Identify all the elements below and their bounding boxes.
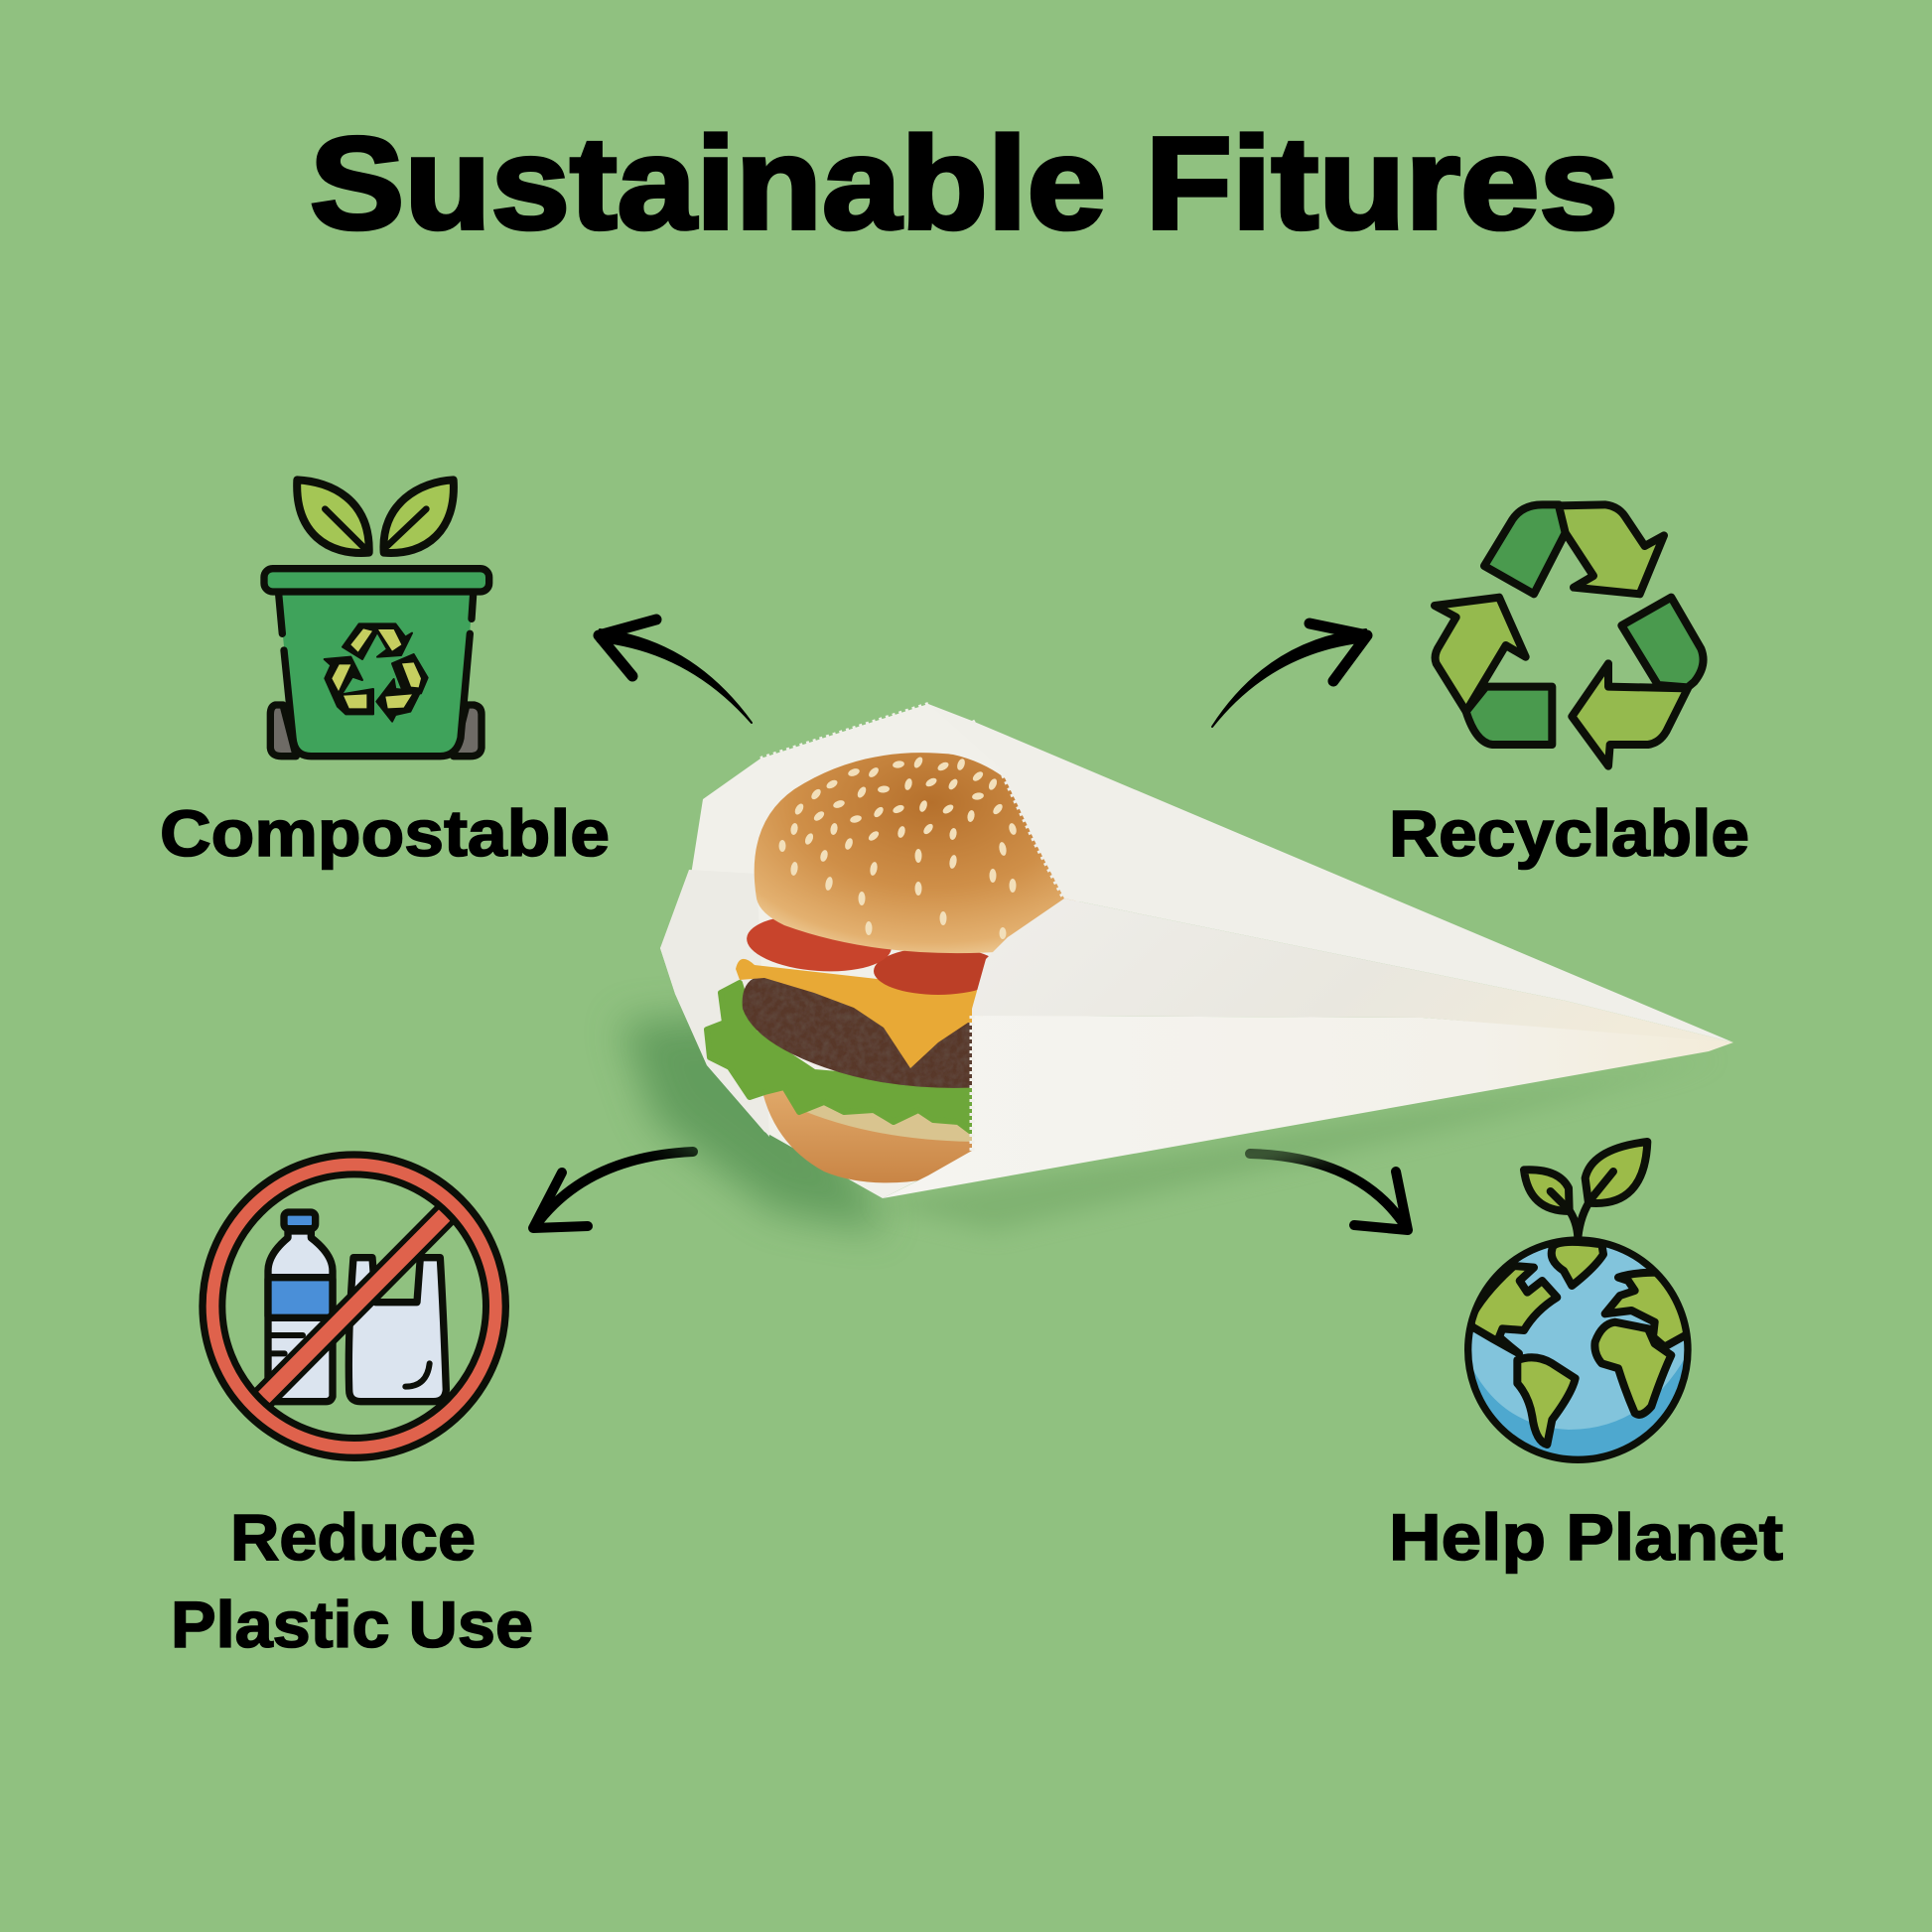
bag lower front panel bbox=[883, 1016, 1733, 1198]
plastic bottle bbox=[268, 1212, 333, 1402]
bag middle front panel bbox=[972, 898, 1733, 1042]
bag top front panel bbox=[928, 704, 1733, 1042]
globe bbox=[1462, 1240, 1695, 1462]
plastic bag bbox=[348, 1258, 446, 1402]
lettuce bbox=[707, 983, 983, 1137]
bag serrated edge bbox=[972, 721, 1064, 1151]
label: Help Planet: Help Planet bbox=[1389, 1500, 1783, 1574]
label: Compostable: Compostable bbox=[160, 796, 610, 870]
bag back panel bbox=[660, 704, 1092, 1198]
sesame seeds bbox=[778, 756, 1018, 939]
label: Reduce Plastic Use: Plastic Use bbox=[171, 1587, 533, 1661]
arrow: to reduce plastic use bbox=[533, 1152, 693, 1228]
arrow: to help planet bbox=[1250, 1154, 1408, 1230]
icon: no plastic sign bbox=[203, 1155, 505, 1457]
sprout bbox=[1524, 1142, 1647, 1238]
title: Sustainable Fitures bbox=[310, 110, 1618, 256]
icon: compost bin with leaves bbox=[264, 480, 489, 757]
arrow: to compostable bbox=[598, 620, 752, 723]
burger in paper bag bbox=[660, 704, 1733, 1198]
icon: planet with sprout bbox=[1462, 1142, 1695, 1462]
icon: recycling symbol bbox=[1435, 504, 1704, 766]
burger bottom bun bbox=[759, 1077, 983, 1182]
top bun bbox=[755, 753, 1077, 953]
burger bun crumb bbox=[784, 1087, 983, 1142]
patty bbox=[743, 975, 983, 1088]
small recycling symbol bbox=[325, 623, 428, 722]
tomato slice rear bbox=[874, 947, 1003, 995]
label: Reduce Plastic Use bbox=[171, 1500, 533, 1661]
arrow: to recyclable bbox=[1212, 623, 1368, 727]
label: Reduce Plastic Use: Reduce bbox=[230, 1500, 476, 1574]
label: Recyclable: Recyclable bbox=[1389, 796, 1749, 870]
shadow under bag bbox=[621, 1013, 1723, 1231]
prohibition slash and ring bbox=[203, 1155, 505, 1457]
tomato slice front bbox=[745, 910, 894, 976]
cheese bbox=[736, 959, 983, 1068]
